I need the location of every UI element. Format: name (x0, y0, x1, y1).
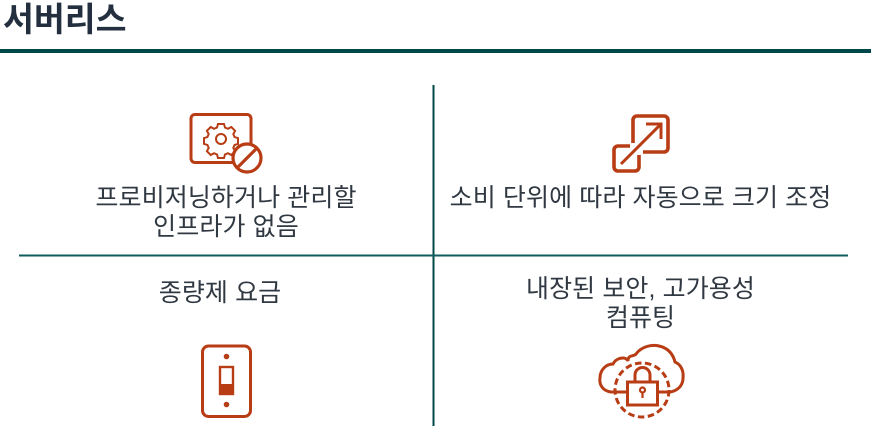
icon: expanding arrow between two squares (614, 116, 668, 171)
text: no infrastructure: 프로비저닝하거나 관리할 (95, 184, 357, 212)
text: built-in security: 컴퓨팅 (606, 304, 675, 332)
text: built-in security (526, 275, 755, 332)
title: 서버리스 (3, 2, 127, 39)
icon: light switch (202, 346, 250, 416)
icon: cloud with padlock (600, 345, 683, 417)
text: auto scaling: 소비 단위에 따라 자동으로 크기 조정 (450, 184, 831, 212)
text: no infrastructure (95, 184, 357, 241)
text: built-in security: 내장된 보안, 고가용성 (526, 275, 755, 303)
text: no infrastructure: 인프라가 없음 (153, 213, 299, 241)
text: pay per use: 종량제 요금 (159, 279, 281, 307)
icon: gear in window with prohibited sign (191, 114, 261, 172)
